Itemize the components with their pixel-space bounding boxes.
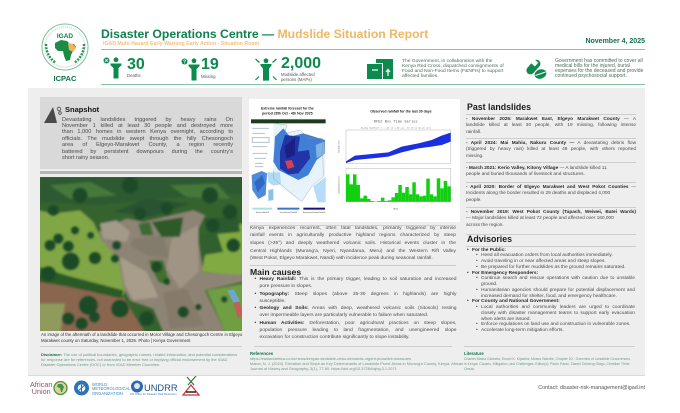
stat: missing [182, 56, 219, 80]
text: snapshot body: area of Elgeyo-Marakwet County, a region recently [62, 142, 233, 148]
icon: person with question mark [182, 58, 200, 80]
main grey panel [28, 88, 645, 376]
advisory: government: Enforce regulations on land use and construction in vulnerable zones. [481, 322, 630, 327]
text: snapshot body: officials. The mudslide swept through the hilly Chesongoch [62, 136, 233, 142]
panel: rainfall charts [249, 99, 460, 222]
stat: deaths: 30 [127, 56, 145, 73]
text: landslide context: slopes (>25°) and deeply weathered volcanic soils. Historical events cluster in the [250, 241, 456, 246]
advisory: emergency responders: • [467, 270, 469, 276]
main grey panel: • [254, 306, 256, 311]
heading: rainfall forecast map: period 28th Oct - 4th Nov 2025 [262, 112, 313, 116]
logo: UNDRR: UN Office for Disaster Risk Reduction [130, 392, 177, 396]
list: main causes: Heavy Rainfall: This is the primary trigger, leading to soil saturation and increased [260, 277, 456, 282]
advisory: public: • [476, 259, 478, 264]
heading: snapshot: Snapshot [65, 105, 99, 114]
advisory: public: • [476, 253, 478, 258]
map: extreme rainfall forecast: Extremely Heavy Rainfall [303, 211, 326, 214]
text: landslide context: rainfall events in agriculturally productive highland regions characterized by steep [250, 233, 456, 238]
logo: UNDRR: UNDRR [144, 383, 178, 393]
text: government relief: Food and Non-Food Items (F&NFIs) to support [402, 69, 503, 74]
text: government medical support: medical bills for the injured, burial [555, 63, 630, 69]
advisory: public: Heed all evacuation orders from local authorities immediately. [481, 253, 613, 258]
text: government relief: affected families. [402, 74, 439, 79]
advisory: emergency responders: • [476, 288, 478, 293]
advisory: government: closely with disaster management teams to support early evacuation [481, 311, 635, 316]
heading: past landslides: Past landslides [467, 102, 531, 112]
event: April 2024: (triggered by heavy rain) killed at least 48 people, with others reported [466, 147, 636, 152]
disclaimer: Disaster Operations Centre (DOC) or from IGAD Member Countries. [41, 362, 160, 367]
text: government medical support: expenses for the deceased and provide [555, 68, 643, 74]
advisory: public [467, 248, 626, 270]
stat: missing: 19 [201, 56, 219, 73]
text: snapshot body: November 1 killed at least 30 people and destroyed more [62, 123, 233, 129]
logo: UNDRR [130, 380, 178, 396]
chart: RFE2 box time series [339, 120, 451, 211]
chart: RFE2 box time series: 30-day Rainfall ( -1.00 to 1.00 Lat, 33.70 to 36.20 Lon) [360, 126, 431, 129]
logo: World Meteorological Organization: ORGANIZATION [92, 391, 123, 396]
list: advisories [467, 248, 635, 333]
photo caption: Marakwet county on Saturday, November 1, 2025. Photo | Kenya Government [41, 338, 190, 343]
event: November 2019: — Major landslides killed at least 72 people and affected over 160,000 [466, 216, 614, 221]
list: main causes: population pressure leading to land fragmentation, and unengineered slope [260, 328, 456, 333]
event: November 2019: across the region. [466, 222, 504, 228]
text: snapshot body [62, 116, 233, 161]
stat: mudslide affected persons [255, 55, 321, 82]
photo caption: An image of the aftermath of a landslide that occurred in Moror Village and Chesongoch Centre in Elgeyo [41, 332, 242, 337]
references: Maina, N. J. (2024). Elevation and Slope as Key Determinants of Landslide Prone Areas in Murang'a County, Kenya. African [250, 360, 463, 366]
stat: mudslide affected persons: persons (MAPs) [281, 77, 312, 82]
subtitle: IGAD Multi-Hazard Early Warning Early Action - Situation Room [103, 41, 259, 47]
heading: advisories: Advisories [467, 234, 512, 244]
text: snapshot body: battered by persistent downpours during the country's [62, 149, 233, 155]
literature: Charles Maina Gichaba, Enoch K. Kipseba, Moses Wandie, Chapter 20 - Overview of Landslide Occurrences [464, 356, 630, 360]
event: April 2020 [466, 184, 636, 202]
map: extreme rainfall forecast: Heavy Rainfall [256, 212, 269, 214]
event: March 2021 [466, 166, 607, 177]
references: Journal of History and Geography, 3(1), 77-90. https://doi.org/10.37284/ajhg.3.1.2071 [250, 366, 397, 370]
photo: landslide aftermath [40, 177, 242, 331]
logo: World Meteorological Organization [74, 380, 130, 396]
chart: RFE2 box time series: Rainfall (mm) [339, 140, 341, 153]
icon: person with cross [104, 57, 122, 78]
advisory: government: when alerts are issued. [481, 317, 531, 322]
text: snapshot body: short rainy season. [62, 155, 109, 161]
advisory: emergency responders [467, 270, 635, 298]
disclaimer [41, 352, 237, 367]
list: main causes: over impermeable layers are particularly vulnerable to failure when saturated. [260, 313, 428, 318]
icon: landslide mountain [44, 106, 62, 123]
disclaimer: for response are for references, not warranted to be error free or implying official endorsement by the IGAD [41, 357, 227, 362]
event: April 2024: missing. [466, 154, 483, 158]
logo: IGAD ICPAC: ICPAC [53, 74, 77, 83]
text: government relief: Kenya Red Cross, dispatched consignments of [402, 64, 504, 69]
contact: Contact: disaster-risk-management@igad.int [538, 384, 645, 390]
list: main causes: Topography: Steep slopes (above 25-30 degrees in highlands) are highly [260, 292, 456, 296]
advisory: public: Be prepared for further mudslides as the ground remains saturated. [481, 265, 626, 270]
chart: RFE2 box time series: Time [393, 209, 399, 211]
advisory: emergency responders: Continue search and rescue operations with caution due to unstable [481, 276, 635, 281]
list: main causes: excavation for construction contribute significantly to slope instability. [260, 335, 410, 340]
text: government medical support: Government has committed to cover all [555, 58, 643, 64]
literature: Omuto [464, 366, 474, 370]
advisory: government: Accelerate long-term mitigation efforts. [481, 328, 564, 333]
references: https://eastandafrica.co.ke/news/kenyan-landslide-crisis-demands-urgent-proactive-measures [250, 356, 411, 360]
literature: Literature [464, 350, 484, 356]
logo: IGAD ICPAC [42, 24, 88, 83]
event: April 2024: - April 2024: Mai Mahiu, Nakuru County — A devastating debris flow [466, 141, 636, 146]
icon: person with radiating arrows [255, 58, 277, 81]
advisory: government [467, 298, 635, 333]
list: past landslides [466, 116, 636, 228]
chart: RFE2 box time series: Daily Rainfall (mm) [339, 176, 341, 193]
logo: African Union: Union [32, 387, 51, 396]
advisory: government: • [467, 299, 469, 304]
main grey panel: • [254, 320, 256, 326]
event: November 2025: rainfall. [466, 130, 481, 134]
main grey panel: • [254, 277, 256, 282]
advisory: emergency responders: ground. [481, 282, 497, 287]
main grey panel: • [254, 292, 256, 296]
text: government relief: The Government, in collaboration with the [402, 59, 493, 64]
event: April 2020: people. [466, 198, 482, 202]
text: landslide context: Kenya experiences recurrent, often fatal landslides, primarily triggered by intense [250, 226, 456, 231]
disclaimer: Disclaimer: The use of political boundaries, geographic names, related information, and potential considerations [41, 352, 237, 356]
advisory: public: For the Public: [472, 248, 506, 252]
advisory: government: Local authorities and community leaders are urged to coordinate [481, 305, 635, 310]
map: extreme rainfall forecast [251, 119, 326, 214]
logo: IGAD ICPAC: IGAD [57, 33, 73, 40]
text: government medical support [555, 58, 644, 79]
event: March 2021: - March 2021: Kerio Valley, Kitony Village — A landslide killed 11 [466, 166, 607, 171]
text: landslide context: Central Highlands (Murang'a, Nyeri, Nyandarua, Meru) and the Western Rift Valley [250, 249, 456, 254]
stat: deaths: Deaths [127, 73, 141, 78]
list: main causes: Human Activities: Deforestation, poor agricultural practices on steep slopes, [260, 320, 456, 326]
literature: in Kenya: Causes, Mitigation, and Challenges, Editor(s): Paolo Paron, Daniel Ochieng Olago, Christian Thine [464, 362, 630, 366]
title: Disaster Operations Centre — Mudslide Situation Report [101, 26, 428, 40]
stat: mudslide affected persons: 2,000 [281, 55, 321, 72]
logos: partner organisations [30, 376, 200, 396]
references: References [250, 350, 273, 356]
date: November 4, 2025 [585, 38, 645, 45]
advisory: public: Avoid traveling in or near affected areas and steep slopes. [481, 259, 606, 264]
event: April 2020: - April 2020: Border of Elgeyo Marakwet and West Pokot Counties — [466, 185, 636, 190]
map: extreme rainfall forecast: Very Heavy Rainfall [280, 212, 298, 214]
text: landslide context: (West Pokot, Elgeyo Marakwet, Nandi) with incidence peak during seasonal rainfall. [250, 256, 433, 261]
event: April 2024 [466, 140, 636, 158]
advisory: government: • [476, 328, 478, 333]
stat: deaths [104, 56, 145, 78]
logo: World Meteorological Organization: WORLD [92, 382, 107, 387]
event: November 2019 [466, 210, 636, 228]
stat: missing: Missing [201, 74, 216, 79]
panel: snapshot [40, 97, 242, 169]
event: November 2025 [466, 116, 636, 134]
references [250, 350, 464, 371]
text: government relief [402, 58, 504, 79]
heading: observed rainfall: Observed rainfall for the last 30 days [370, 109, 432, 113]
advisory: government: For County and National Government: [472, 299, 560, 304]
icon: relief boxes [367, 59, 393, 79]
stat: mudslide affected persons: Mudslide affected [281, 72, 315, 77]
event: November 2025: landslide killed at least 30 people, with 19 missing, following intense [466, 123, 636, 128]
logo: African Union [30, 380, 68, 396]
list: main causes: pore pressure in slopes. [260, 284, 312, 289]
advisory: government: • [476, 322, 478, 327]
advisory: public: • [467, 248, 469, 252]
icon: medicine pills [526, 60, 546, 79]
heading: rainfall forecast map: Extreme rainfall forecast for the [261, 106, 314, 110]
logo: African Union: African [30, 380, 52, 389]
list: main causes: Geology and Soils: Areas with deep, weathered volcanic soils (nitosols) resting [260, 306, 457, 311]
text: government medical support: continued psychosocial support. [555, 73, 627, 79]
text: landslide context [250, 225, 456, 261]
advisory: emergency responders: Humanitarian agencies should prepare for potential displacement and [481, 288, 635, 293]
icon: person with question mark: ? [183, 60, 186, 66]
advisory: emergency responders: increased demand for shelter, food, and emergency healthcare. [481, 294, 617, 298]
advisory: public: • [476, 265, 478, 270]
logo: Kenya National Disaster emblem [182, 376, 200, 396]
list: main causes [254, 276, 457, 340]
chart: RFE2 box time series: RFE2 Box Time Series [374, 120, 418, 125]
list: main causes: susceptible. [260, 299, 286, 304]
event: March 2021: people and buried thousands of livestock and structures. [466, 172, 585, 177]
event: November 2025: - November 2025: Marakwet East, Elgeyo Marakwet County — A [466, 117, 636, 122]
advisory: government: • [476, 305, 478, 310]
literature [464, 350, 630, 370]
event: November 2019: - November 2019: West Pokot County (Tapach, Weiwei, Batei Wards) [466, 210, 636, 215]
text: snapshot body: than 1,000 homes in western Kenya overnight, according to [62, 129, 233, 135]
advisory: emergency responders: For Emergency Responders: [472, 270, 538, 276]
text: snapshot body: Devastating landslides triggered by heavy rains On [62, 116, 233, 122]
logo: World Meteorological Organization: METEOROLOGICAL [92, 386, 130, 391]
heading: main causes: Main causes [250, 266, 301, 276]
advisory: emergency responders: • [476, 276, 478, 281]
photo caption [41, 332, 242, 343]
event: April 2020: Incidents along the border resulted in 29 deaths and displaced 4,000 [466, 191, 610, 196]
